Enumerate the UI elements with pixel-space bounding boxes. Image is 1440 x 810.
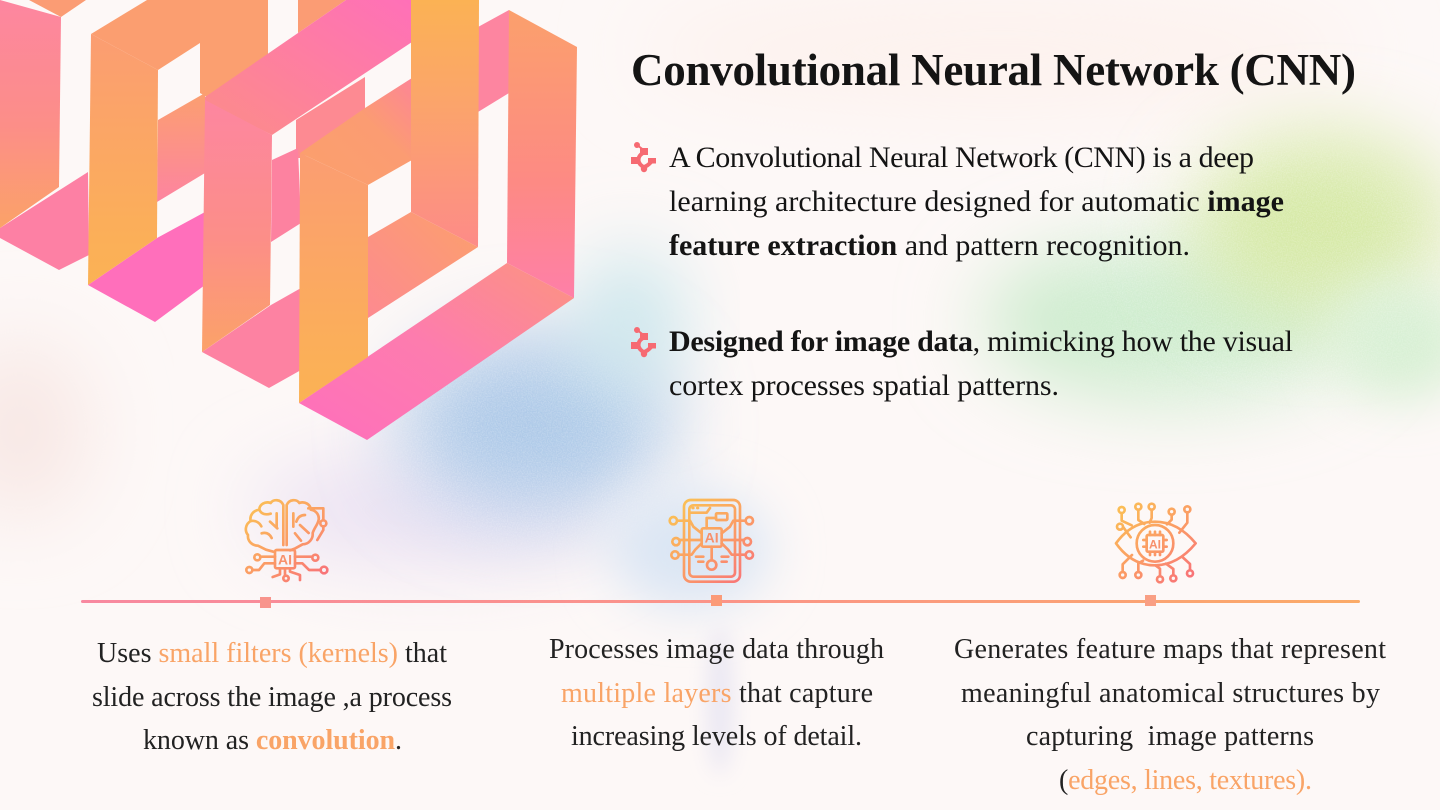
text block: column 3: (edges, lines, textures).: [1059, 765, 1312, 796]
text block: column 3: Generates feature maps that represent: [954, 634, 1386, 665]
bullet icon 2: [631, 327, 656, 357]
bullet text 2: Designed for image data, mimicking how the visual: [669, 325, 1293, 358]
title: Convolutional Neural Network (CNN): [631, 45, 1356, 95]
bullet text 1: [669, 141, 1284, 262]
icon: AI eye: AI: [1149, 537, 1161, 551]
text block: column 1: known as convolution.: [143, 725, 402, 756]
icon: AI brain: [246, 500, 327, 581]
text block: column 2: [549, 634, 884, 752]
text block: column 2: increasing levels of detail.: [571, 721, 862, 752]
icon: AI eye: [1116, 504, 1196, 582]
text block: column 3: [954, 634, 1386, 796]
text block: column 1: [92, 638, 452, 756]
bullet text 1: learning architecture designed for automatic image: [669, 185, 1284, 218]
bullet text 2: cortex processes spatial patterns.: [669, 369, 1059, 402]
timeline with markers: [81, 595, 1360, 608]
bullet text 1: A Convolutional Neural Network (CNN) is a deep: [669, 141, 1254, 174]
icon: AI device: AI: [705, 530, 719, 546]
text block: column 2: Processes image data through: [549, 634, 884, 665]
bullet icon 1: [631, 142, 656, 172]
text block: column 2: multiple layers that capture: [561, 678, 873, 709]
text block: column 1: Uses small filters (kernels) that: [97, 638, 447, 669]
illustration: isometric ribbon shape: [0, 0, 577, 440]
bullet text 1: feature extraction and pattern recognition.: [669, 229, 1190, 262]
icon: AI device: [670, 500, 753, 582]
text block: column 1: slide across the image ,a process: [92, 682, 452, 713]
icon: AI brain: AI: [278, 551, 292, 567]
bullet text 2: [669, 325, 1293, 402]
text block: column 3: capturing image patterns: [1026, 721, 1314, 752]
text block: column 3: meaningful anatomical structures by: [961, 678, 1380, 709]
